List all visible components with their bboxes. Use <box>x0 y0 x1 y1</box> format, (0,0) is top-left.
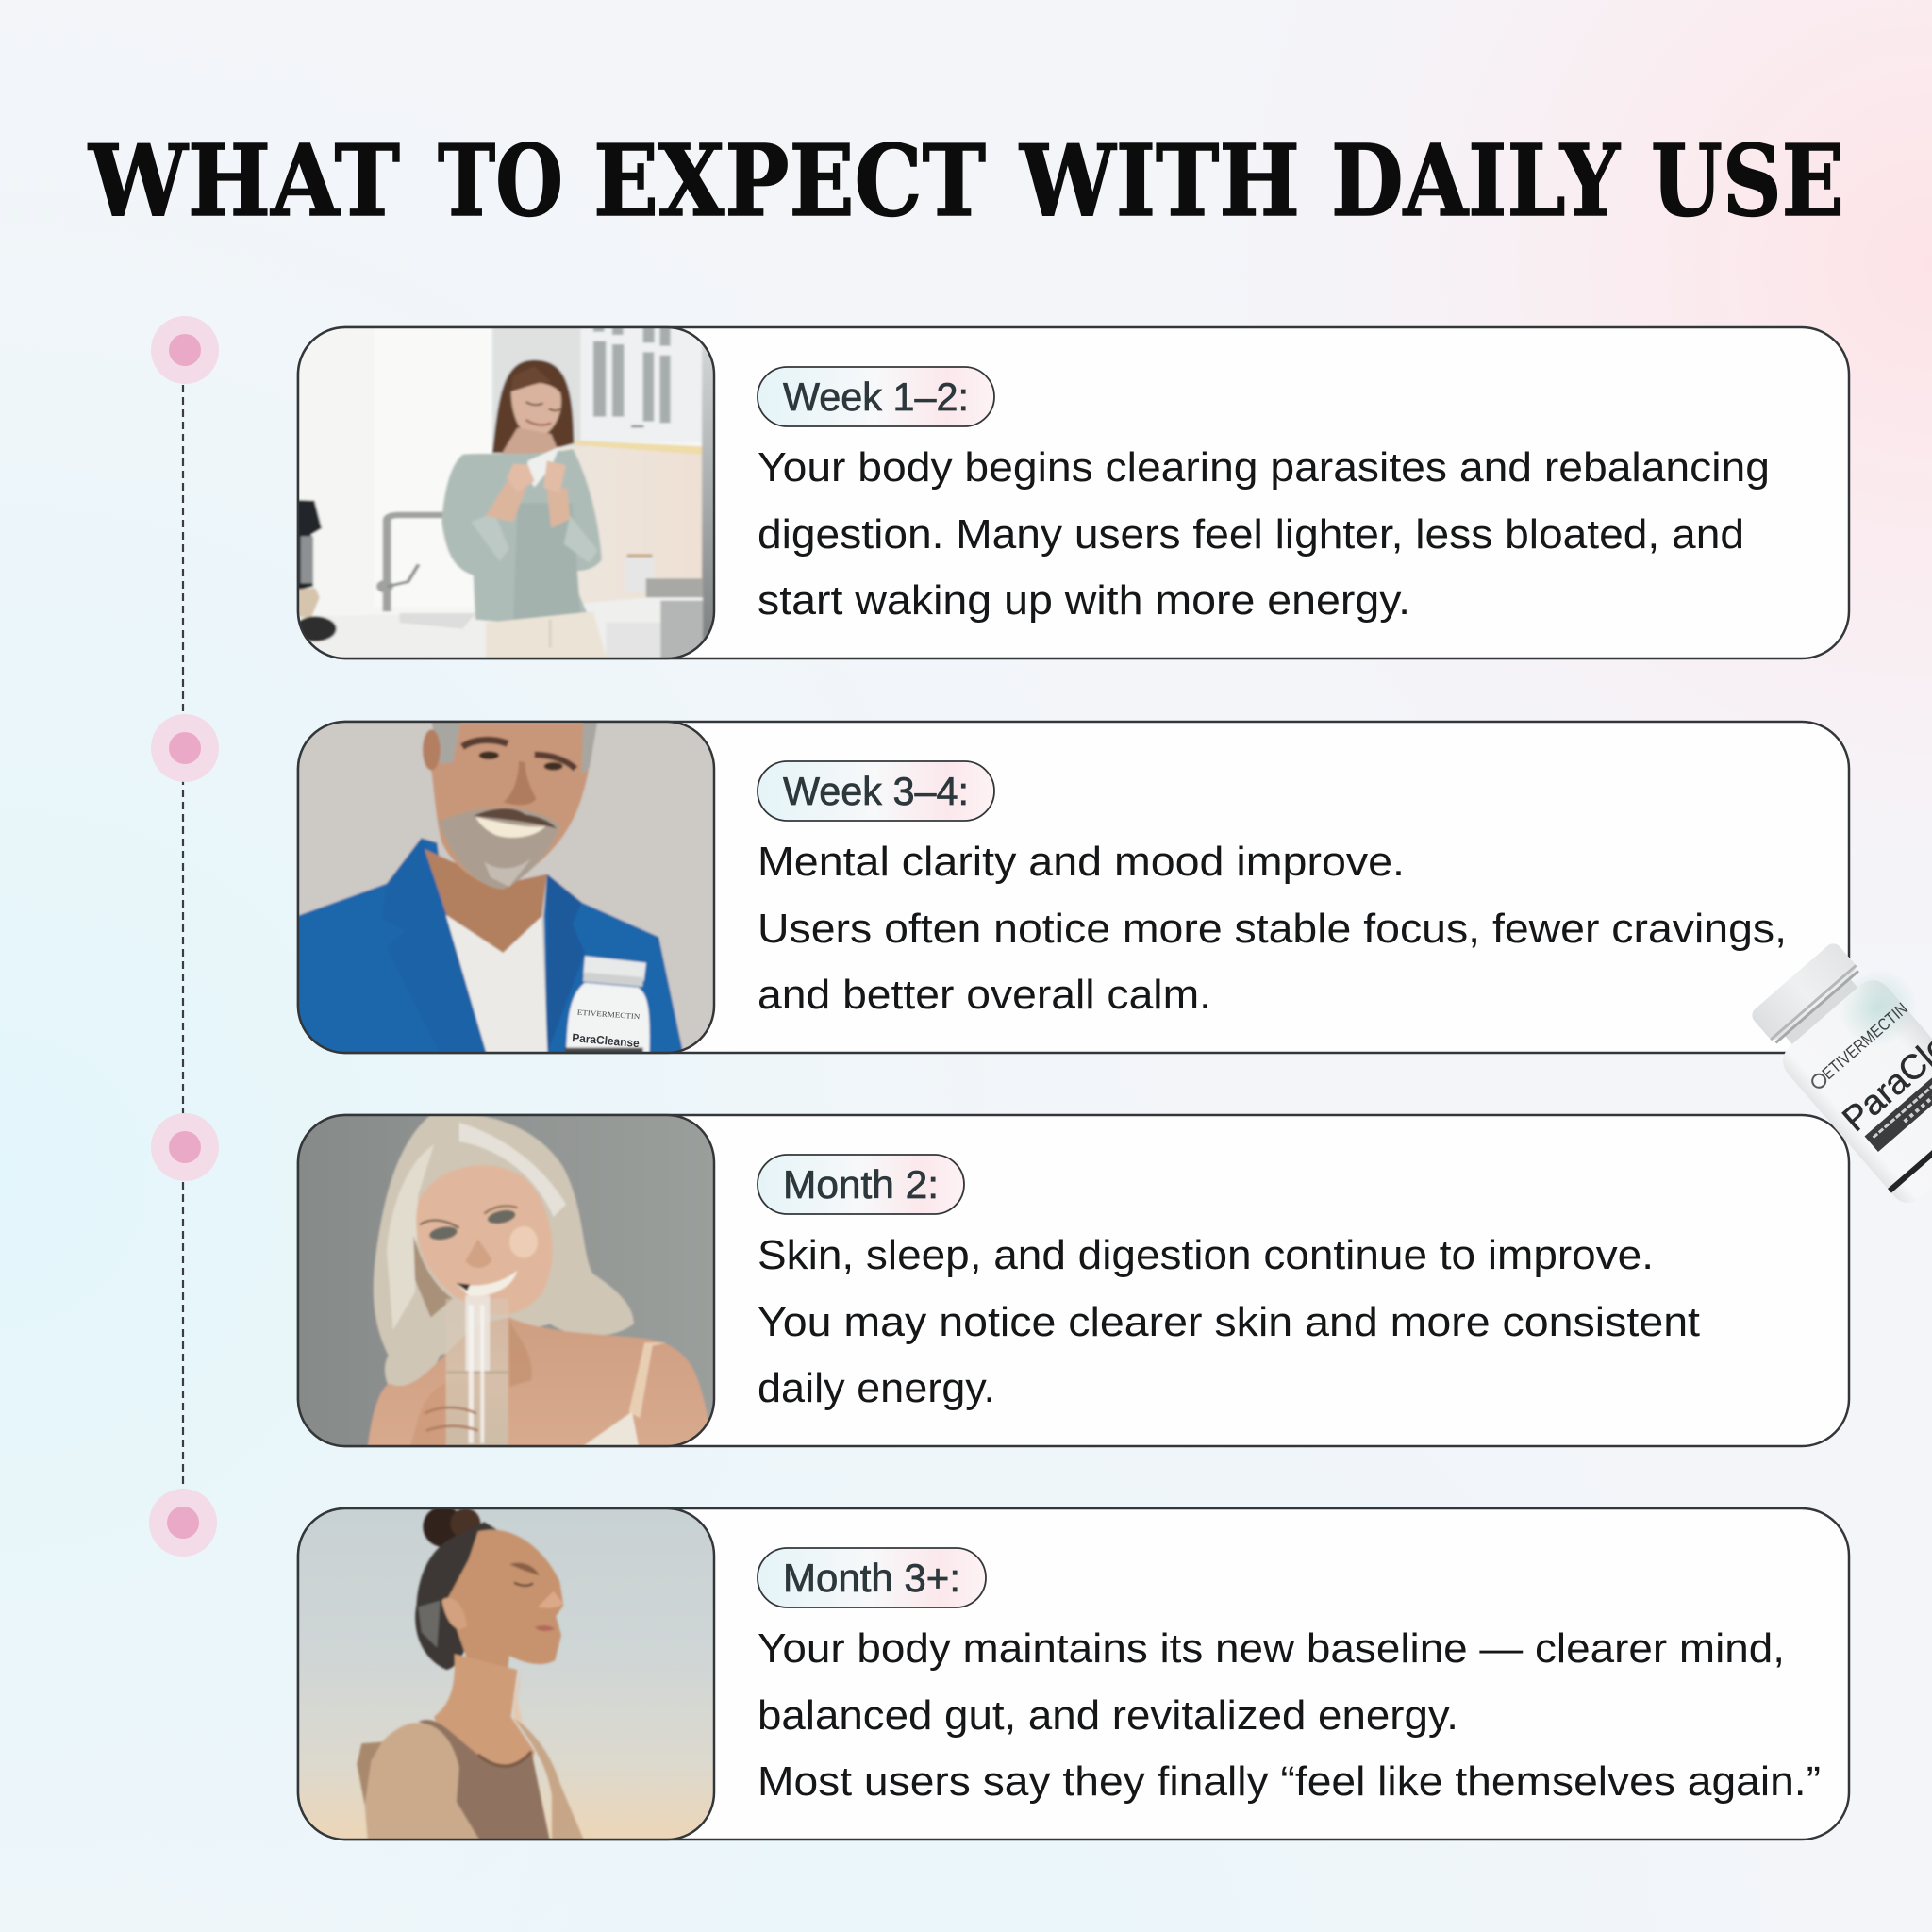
period label: month 3+ <box>758 1548 986 1607</box>
title: TO <box>438 123 563 239</box>
period label: week 1-2 <box>758 367 994 426</box>
timeline dashed line <box>182 373 184 1506</box>
bottle label <box>1799 945 1932 1193</box>
panel: month 3+ <box>292 1507 1849 1846</box>
description text: digestion. Many users feel lighter, less bloated, and <box>758 511 1744 558</box>
description text: balanced gut, and revitalized energy. <box>758 1692 1458 1739</box>
bottle cap <box>1749 941 1872 1058</box>
photo: blonde woman drinking water <box>292 1110 720 1453</box>
description text <box>758 1232 1700 1411</box>
description text <box>758 1625 1821 1805</box>
period label: month 2: Month 2: <box>783 1162 939 1207</box>
description text: You may notice clearer skin and more consistent <box>758 1299 1700 1345</box>
timeline node 2 <box>151 714 219 782</box>
photo: woman with a cup in a kitchen <box>294 324 720 663</box>
card background <box>298 1115 1849 1446</box>
description text <box>758 444 1770 624</box>
description text: Users often notice more stable focus, fewer cravings, <box>758 906 1787 952</box>
description text <box>758 839 1787 1018</box>
description text: and better overall calm. <box>758 972 1211 1018</box>
photo: smiling man in blue blazer holding bottle <box>292 717 720 1058</box>
photo border <box>298 1115 714 1446</box>
photo border <box>298 327 714 658</box>
description text: start waking up with more energy. <box>758 577 1410 624</box>
bottle label text: ParaCleanse <box>572 1031 640 1050</box>
description text: Your body begins clearing parasites and rebalancing <box>758 444 1770 491</box>
timeline <box>149 316 219 1557</box>
description text: Mental clarity and mood improve. <box>758 839 1405 885</box>
timeline node 3 <box>151 1113 219 1181</box>
bottle label text: ETIVERMECTIN <box>576 1008 641 1021</box>
period label: month 3+: Month 3+: <box>783 1556 960 1600</box>
panel: month 2 <box>292 1110 1849 1453</box>
panel: week 3-4 <box>292 717 1849 1058</box>
title <box>88 123 1844 239</box>
card background <box>298 722 1849 1053</box>
bottle body <box>1770 945 1932 1210</box>
period label: month 2 <box>758 1155 964 1214</box>
title: WITH <box>1019 123 1300 239</box>
title: EXPECT <box>593 123 986 239</box>
timeline node 1 <box>151 316 219 384</box>
bottle label text <box>572 1009 640 1047</box>
photo border <box>298 722 714 1053</box>
period label: week 3-4: Week 3–4: <box>783 769 969 813</box>
description text: Most users say they finally “feel like themselves again.” <box>758 1758 1821 1805</box>
description text: Your body maintains its new baseline — clearer mind, <box>758 1625 1785 1672</box>
title: WHAT <box>88 123 400 239</box>
description text: daily energy. <box>758 1365 995 1411</box>
card background <box>298 1508 1849 1840</box>
title: DAILY <box>1331 123 1621 239</box>
product bottle <box>1741 880 1932 1210</box>
panel: week 1-2 <box>294 324 1849 663</box>
description text: Skin, sleep, and digestion continue to improve. <box>758 1232 1654 1278</box>
photo border <box>298 1508 714 1840</box>
period label: week 1-2: Week 1–2: <box>783 375 969 419</box>
card background <box>298 327 1849 658</box>
bottle label: ETIVERMECTIN <box>1819 999 1911 1083</box>
timeline node 4 <box>149 1489 217 1557</box>
period label: week 3-4 <box>758 761 994 821</box>
title: USE <box>1651 123 1844 239</box>
photo: serene woman in profile at sunrise <box>292 1507 720 1846</box>
